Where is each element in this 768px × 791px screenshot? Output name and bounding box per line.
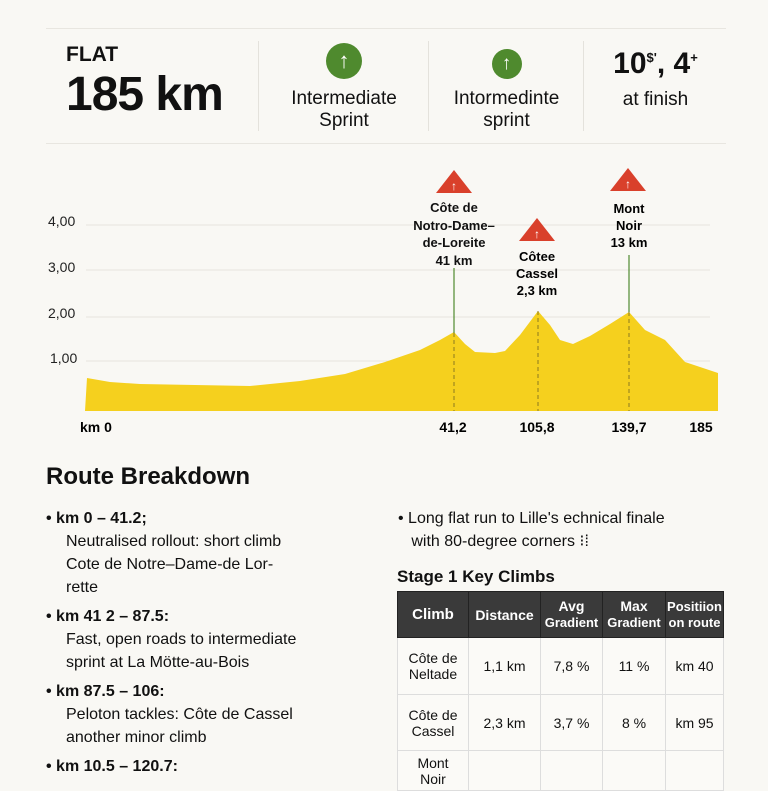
climb marker 1: Côte de — [430, 200, 478, 215]
key climbs table: Gradient — [607, 615, 661, 630]
key climbs table: 7,8 % — [554, 658, 589, 674]
stat: flat 185 km: FLAT — [66, 43, 118, 66]
finale note — [398, 510, 665, 550]
climb marker 1: ↑ — [451, 179, 457, 193]
climb marker 1: 41 km — [436, 253, 472, 268]
key climbs table: 3,7 % — [554, 714, 589, 730]
key climbs table: Climb — [412, 606, 454, 622]
climb marker 1: Notro-Dame– — [413, 218, 495, 233]
route breakdown list — [46, 510, 296, 775]
x axis labels: 139,7 — [611, 419, 647, 435]
key climbs table: Mont — [417, 754, 449, 770]
stat: flat 185 km: 185 km — [66, 68, 223, 121]
climb marker 2: Cassel — [516, 266, 558, 281]
header stats panel — [46, 28, 726, 144]
key climbs table — [397, 591, 724, 791]
climb marker 2 — [516, 218, 558, 298]
y axis labels: 1,00 — [50, 350, 77, 366]
route breakdown list: rette — [66, 579, 98, 596]
finale note: • Long flat run to Lille's echnical finale — [398, 510, 665, 527]
x axis labels: 185 — [689, 419, 713, 435]
route breakdown list: Neutralised rollout: short climb — [66, 533, 281, 550]
key climbs table: Côte de — [408, 650, 458, 666]
stat: intermediate sprint 1: Sprint — [319, 110, 369, 131]
route breakdown list: • km 0 – 41.2; — [46, 510, 147, 527]
climb marker 3: 13 km — [611, 235, 647, 250]
key climbs table: Neltade — [409, 666, 457, 682]
y axis labels: 3,00 — [48, 259, 75, 275]
stat: intermediate sprint 1: ↑ — [338, 48, 350, 73]
y axis labels: 2,00 — [48, 305, 75, 321]
key climbs table: on route — [668, 614, 720, 630]
stat: intermediate sprint 2 — [428, 41, 584, 131]
route breakdown list: Cote de Notre–Dame-de Lor- — [66, 556, 273, 573]
key climbs table: Max — [620, 598, 648, 614]
climb marker 3: ↑ — [625, 177, 631, 191]
stat: at finish — [583, 41, 727, 131]
route breakdown list: Fast, open roads to intermediate — [66, 631, 296, 648]
heading: route breakdown: Route Breakdown — [46, 463, 250, 490]
x axis labels — [80, 419, 713, 435]
key climbs table: km 95 — [675, 714, 714, 730]
key climbs table: km 40 — [675, 658, 714, 674]
key climbs table: Cassel — [412, 722, 454, 738]
key climbs table: 2,3 km — [483, 714, 526, 730]
route breakdown list: • km 87.5 – 106: — [46, 683, 165, 700]
stat: intermediate sprint 2: ↑ — [502, 53, 511, 74]
climb marker 2: ↑ — [534, 227, 540, 241]
stat: intermediate sprint 1: Intermediate — [291, 88, 397, 109]
finale note: with 80-degree corners ⁝⁞ — [411, 533, 589, 550]
climb marker 3: Noir — [616, 218, 642, 233]
key climbs table: Distance — [475, 606, 534, 622]
climb marker 2: Côtee — [519, 249, 555, 264]
route breakdown list: Peloton tackles: Côte de Cassel — [66, 706, 293, 723]
key climbs table: 8 % — [622, 714, 646, 730]
key climbs table: Côte de — [408, 706, 458, 722]
route breakdown list: sprint at La Mötte-au-Bois — [66, 654, 249, 671]
stat: at finish: at finish — [623, 89, 688, 110]
heading: stage 1 key climbs: Stage 1 Key Climbs — [397, 567, 555, 586]
stat: at finish: 10$', 4+ — [613, 47, 698, 80]
profile area — [85, 311, 718, 411]
route breakdown list: • km 10.5 – 120.7: — [46, 758, 178, 775]
stat: intermediate sprint 2: sprint — [483, 110, 530, 131]
stat: intermediate sprint 2: Intormedinte — [454, 88, 559, 109]
stat: flat 185 km — [66, 43, 223, 121]
key climbs table: Noir — [420, 770, 446, 786]
route breakdown list: another minor climb — [66, 729, 206, 746]
y axis labels: 4,00 — [48, 213, 75, 229]
elevation profile chart — [48, 168, 718, 435]
y axis labels — [48, 213, 77, 366]
climb marker 2: 2,3 km — [517, 283, 557, 298]
x axis labels: 41,2 — [439, 419, 467, 435]
key climbs table: Positiion — [667, 598, 722, 614]
stat: intermediate sprint 1 — [258, 41, 429, 131]
climb marker 3 — [610, 168, 647, 250]
climb marker 1: de-Loreite — [423, 235, 485, 250]
key climbs table: 1,1 km — [483, 658, 526, 674]
key climbs table: 11 % — [619, 658, 649, 674]
climb marker 3: Mont — [613, 201, 645, 216]
x axis labels: km 0 — [80, 419, 112, 435]
route breakdown list: • km 41 2 – 87.5: — [46, 608, 169, 625]
climb marker 1 — [413, 170, 495, 268]
key climbs table: Avg — [559, 598, 584, 614]
x axis labels: 105,8 — [519, 419, 555, 435]
key climbs table: Gradient — [545, 615, 598, 630]
